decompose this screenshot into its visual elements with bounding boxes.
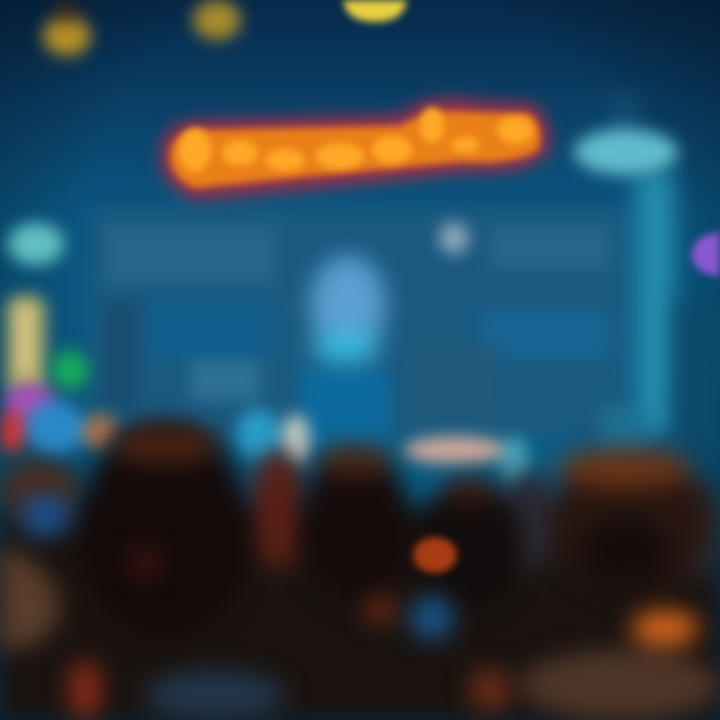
person: left head hair — [110, 427, 220, 463]
building: central facade — [92, 208, 627, 450]
person: right-centre head — [418, 476, 522, 611]
lights: left multicolour cluster — [0, 350, 118, 456]
tower: left colourful tower — [6, 295, 46, 395]
light: purple far right — [692, 232, 720, 276]
building: far right — [676, 300, 720, 450]
light: central blue glow — [310, 255, 386, 364]
lights: street level glow — [236, 405, 650, 488]
tower: right spire — [620, 95, 674, 435]
lights: crowd foreground accents — [0, 493, 720, 720]
light: small pale window — [439, 222, 469, 254]
person: centre head — [299, 444, 411, 603]
lamp: top right — [343, 0, 407, 22]
light: orange phone glow — [413, 537, 457, 573]
lamp: top centre — [193, 0, 241, 40]
tower: spire disc — [574, 129, 678, 175]
person: left head red accent — [129, 544, 161, 580]
light: cyan left — [8, 223, 64, 265]
crowd: background dark mass — [0, 450, 720, 720]
person: left head — [79, 422, 251, 638]
lamp: top left — [43, 1, 91, 56]
sign: glowing orange marquee — [160, 98, 550, 200]
person: right head — [552, 448, 708, 592]
